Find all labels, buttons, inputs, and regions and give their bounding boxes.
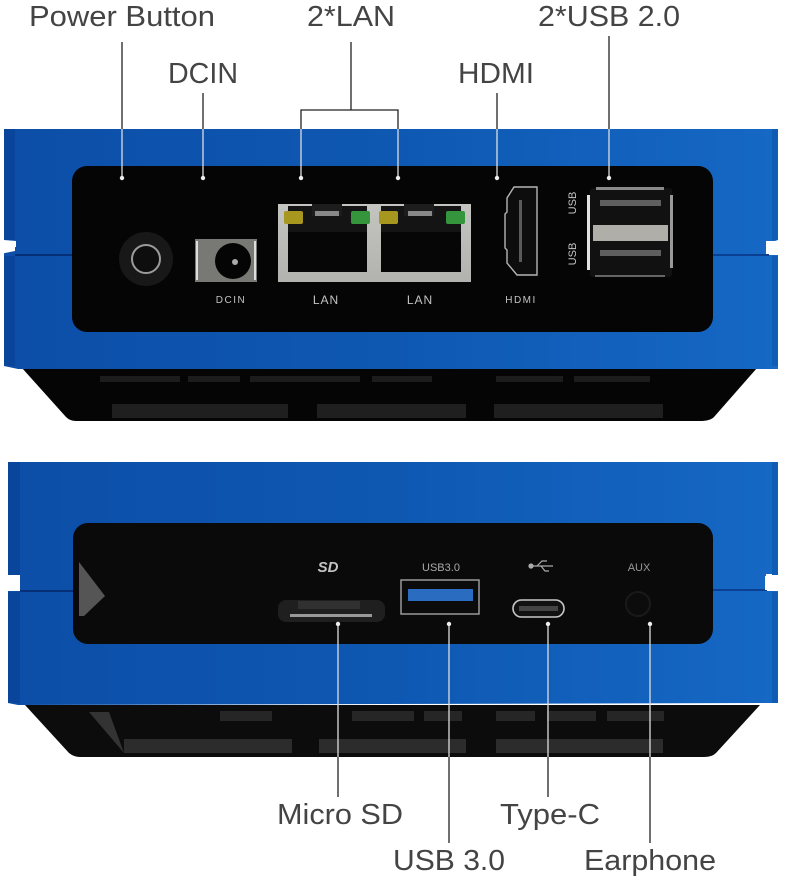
panel reflection bbox=[79, 562, 105, 616]
dual USB 2.0 ports bbox=[587, 187, 673, 277]
DC power jack bbox=[195, 239, 257, 282]
USB-C port bbox=[513, 600, 564, 617]
icon: SD logo: SD bbox=[318, 559, 339, 576]
blue chassis bbox=[0, 462, 789, 705]
callout: 2*USB 2.0 bbox=[538, 1, 680, 180]
vented black base bbox=[25, 705, 760, 757]
callout: Type-C: Type-C bbox=[500, 799, 600, 831]
black port panel bbox=[73, 523, 713, 644]
silk-screen port labels bbox=[216, 192, 579, 307]
icon: power button bbox=[119, 232, 173, 286]
silk-screen port labels: LAN bbox=[407, 293, 433, 307]
callout: Micro SD: Micro SD bbox=[277, 799, 403, 831]
callout: Type-C bbox=[500, 622, 600, 831]
HDMI port bbox=[505, 187, 537, 275]
callout: 2*LAN: 2*LAN bbox=[307, 1, 395, 33]
USB 3.0 port bbox=[401, 580, 479, 614]
callout: 2*LAN bbox=[299, 1, 400, 180]
silk-screen port labels: HDMI bbox=[505, 295, 537, 306]
callout: 2*USB 2.0: 2*USB 2.0 bbox=[538, 1, 680, 33]
top device: rear view bbox=[0, 129, 789, 421]
earphone jack bbox=[626, 592, 650, 616]
callout: Earphone: Earphone bbox=[584, 845, 716, 877]
USB 3.0 silk-screen label: USB3.0 bbox=[422, 562, 460, 574]
dual LAN jacks bbox=[278, 204, 471, 282]
bottom device: front view bbox=[0, 462, 789, 757]
silk-screen port labels: LAN bbox=[313, 293, 339, 307]
silk-screen port labels: DCIN bbox=[216, 295, 246, 306]
callout: HDMI: HDMI bbox=[458, 58, 534, 90]
callout: Power Button: Power Button bbox=[29, 1, 215, 33]
callout: DCIN bbox=[168, 58, 238, 180]
callout: USB 3.0 bbox=[393, 622, 505, 877]
callout: DCIN: DCIN bbox=[168, 58, 238, 90]
callout: Earphone bbox=[584, 622, 716, 877]
black port panel bbox=[72, 166, 713, 332]
callout: Micro SD bbox=[277, 622, 403, 831]
silk-screen port labels: USB bbox=[567, 192, 579, 214]
icon: USB symbol bbox=[529, 561, 553, 571]
callout: USB 3.0: USB 3.0 bbox=[393, 845, 505, 877]
AUX silk-screen label: AUX bbox=[628, 562, 651, 574]
callout: Power Button bbox=[29, 1, 215, 180]
silk-screen port labels: USB bbox=[567, 243, 579, 265]
HDMI contacts bbox=[519, 200, 522, 262]
microSD slot bbox=[278, 600, 385, 622]
blue chassis bbox=[0, 129, 789, 369]
vented black base bbox=[22, 368, 757, 421]
callout: HDMI bbox=[458, 58, 534, 180]
